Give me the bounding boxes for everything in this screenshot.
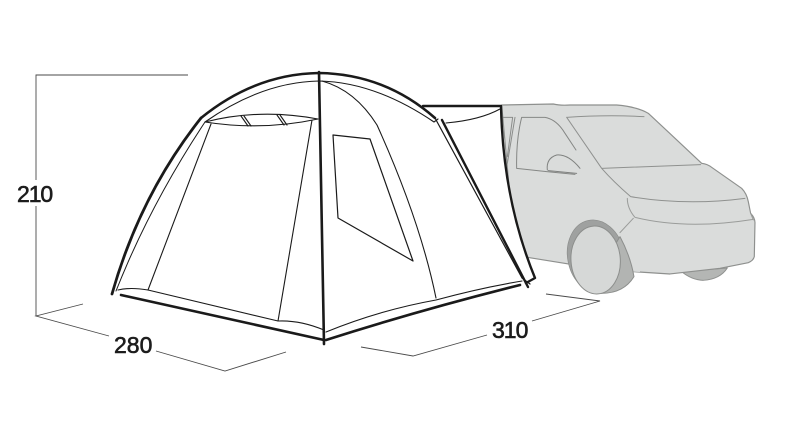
wheel arch: [561, 215, 631, 299]
outer arch pole: [201, 73, 435, 118]
rear wheel: [682, 268, 727, 280]
tent white fill: [112, 73, 535, 343]
side seam: [322, 81, 436, 298]
front door panel: [148, 120, 312, 321]
rear side window: [503, 117, 515, 163]
label: width: 280: [114, 332, 152, 358]
front tyre: [593, 237, 634, 293]
centre pole: [319, 72, 324, 344]
dimension lines: [36, 75, 600, 371]
van illustration: [502, 104, 755, 299]
depth bracket 310: [361, 294, 600, 356]
wing mirror: [547, 155, 580, 173]
left base hem: [121, 295, 324, 340]
door window: [517, 117, 576, 174]
tent: [112, 72, 535, 344]
right base hem: [326, 285, 520, 340]
width bracket 280: [36, 304, 286, 371]
side window: [333, 135, 413, 261]
label: height: 210: [17, 181, 52, 207]
windscreen: [567, 116, 745, 202]
bumper lines: [620, 198, 753, 233]
side sail: [423, 106, 535, 283]
height bracket: [36, 75, 188, 316]
inner arch line: [205, 81, 438, 122]
label: depth: 310: [492, 317, 528, 343]
van body: [502, 104, 755, 274]
roof vent: [205, 114, 318, 126]
arch lower body fill: [624, 237, 640, 272]
right corner pole: [442, 120, 528, 287]
left corner pole: [112, 118, 201, 294]
front wheel: [569, 224, 623, 296]
